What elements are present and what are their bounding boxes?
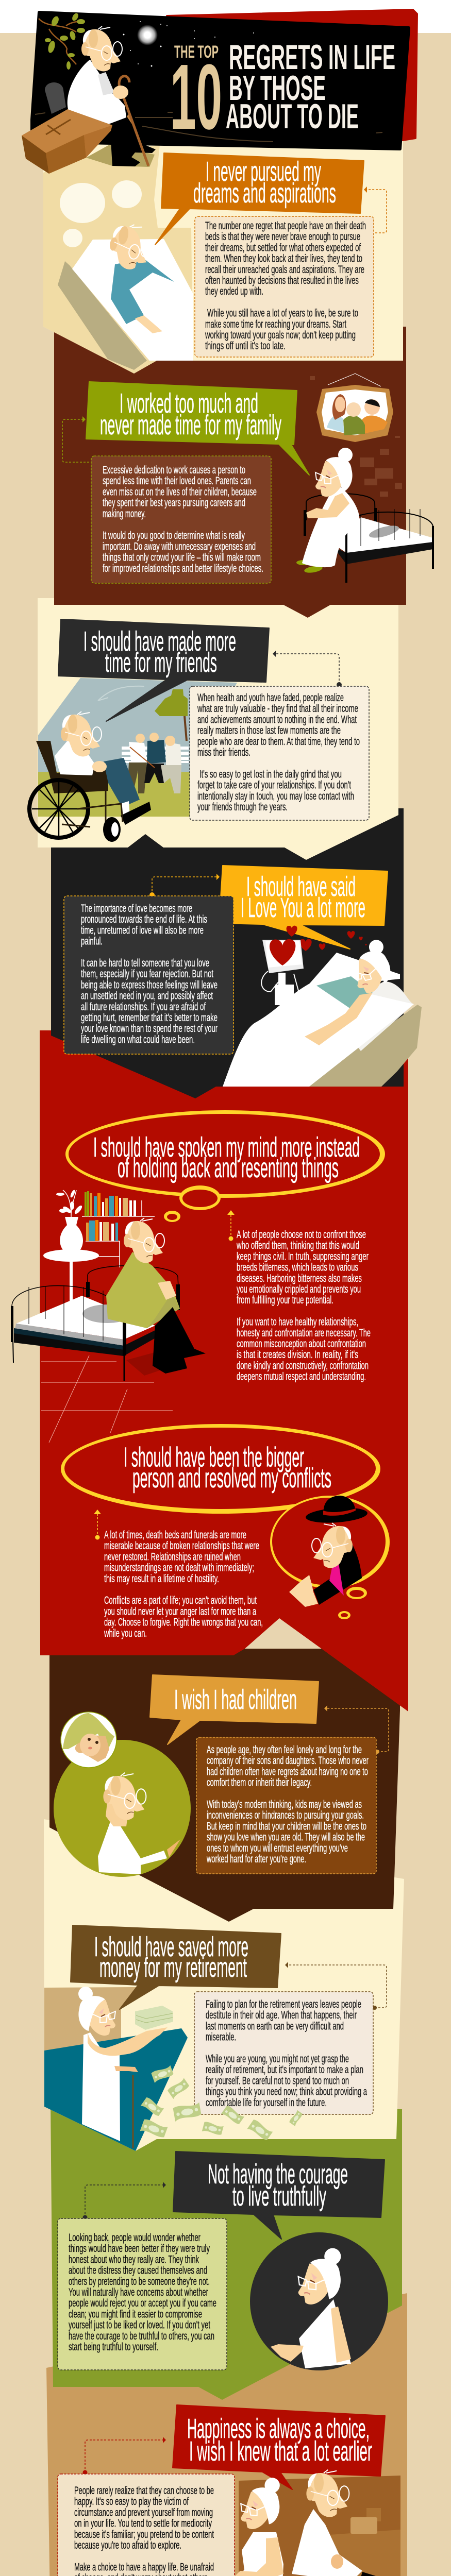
speech bubble bbox=[86, 382, 309, 475]
icon: moon bbox=[137, 25, 158, 45]
body text: others by pretending to be someone they're not. bbox=[69, 2276, 210, 2287]
body text: miserable. bbox=[206, 2031, 236, 2043]
panel: section 10 background bbox=[46, 2293, 407, 2576]
body text: reality of retirement, but it's important to make a plan bbox=[206, 2064, 363, 2076]
room: shelves, books and vase bbox=[41, 1189, 173, 1443]
hospital bed with old man bbox=[58, 221, 193, 370]
speech bubble bbox=[71, 1925, 281, 2009]
body text: making money. bbox=[103, 508, 146, 520]
body text: have the courage to be truthful to others, you can bbox=[69, 2330, 214, 2342]
icon: coffin bbox=[22, 109, 112, 174]
connector arrow bbox=[94, 1510, 101, 1539]
body text: While you are young, you might not yet grasp the bbox=[206, 2053, 349, 2065]
dark circle with old woman bbox=[250, 2232, 388, 2370]
panel: section 8 background bbox=[44, 1819, 404, 2151]
heading bbox=[83, 626, 236, 678]
body text: their dreams, but settled for what others expected of bbox=[205, 242, 361, 253]
body text: You will naturally have concerns about whether bbox=[69, 2286, 208, 2298]
ground shadow bbox=[86, 145, 155, 167]
panel: section 4 background bbox=[51, 804, 404, 1098]
heading bbox=[93, 1132, 360, 1183]
body text: honesty and confrontation are necessary. The bbox=[237, 1327, 371, 1339]
body text: even miss out on the lives of their children, because bbox=[103, 486, 257, 498]
park scene with wheelchair bbox=[29, 678, 237, 842]
connector arrow bbox=[273, 651, 342, 687]
body text: you should never let your anger last for more than a bbox=[104, 1605, 256, 1617]
body text: what are truly valuable - they find that all their income bbox=[197, 703, 358, 715]
body text: all future relationships. If you are afraid of bbox=[81, 1001, 206, 1013]
connector arrow bbox=[82, 2437, 166, 2475]
body text: for improved relationships and better lifestyle choices. bbox=[103, 563, 263, 574]
panel: section 2 background bbox=[54, 327, 406, 618]
panel: section 7 background bbox=[49, 1649, 400, 1922]
body text: important. Do away with unnecessary expenses and bbox=[103, 540, 256, 552]
body text: about the distress they caused themselves and bbox=[69, 2265, 207, 2277]
body text: things off until it's too late. bbox=[205, 340, 286, 352]
body text: clean; you might find it easier to compromise bbox=[69, 2308, 202, 2320]
body text: keep things civil. In truth, suppressing anger bbox=[237, 1250, 369, 1262]
body text: from fulfilling your true potential. bbox=[237, 1294, 333, 1306]
body text: honest about who they really are. They think bbox=[69, 2253, 199, 2265]
body text: who offend them, thinking that this would bbox=[236, 1240, 359, 1251]
body text bbox=[81, 903, 218, 1045]
body text: while you can. bbox=[104, 1628, 147, 1639]
stars bbox=[123, 21, 254, 67]
section 3: regret three bbox=[29, 619, 369, 842]
body text: an unsettled need in you, and possibly affect bbox=[81, 990, 213, 1002]
body text: common misconception about confrontation bbox=[237, 1338, 366, 1350]
teal couch bbox=[44, 2028, 188, 2151]
body text: deepens mutual respect and understanding. bbox=[237, 1371, 366, 1383]
tree branch bbox=[39, 12, 85, 70]
body text: Looking back, people would wonder whether bbox=[69, 2232, 201, 2244]
section 4: regret four bbox=[64, 866, 422, 1087]
connector arrow bbox=[227, 1210, 235, 1241]
body text: things that only crowd your life – this will make room bbox=[103, 552, 261, 564]
body text: People rarely realize that they can choose to be bbox=[74, 2485, 214, 2497]
arrowhead bbox=[82, 416, 86, 422]
section 8: regret eight: I should have saved more bbox=[94, 1931, 248, 1962]
body text: While you still have a lot of years to live, be sure to bbox=[207, 308, 358, 319]
body text: time, unreturned of love will also be more bbox=[81, 924, 204, 936]
text box bbox=[194, 1992, 373, 2114]
body text: is that it creates division. In reality, if it's bbox=[237, 1349, 358, 1361]
body text bbox=[197, 692, 360, 813]
body text: If you want to have healthy relationships, bbox=[237, 1316, 358, 1328]
body text: they spent their best years pursuing careers and bbox=[103, 497, 245, 509]
section 2: regret two bbox=[62, 374, 434, 583]
title bbox=[170, 38, 395, 149]
body text: start being truthful to yourself. bbox=[69, 2341, 158, 2353]
heading bbox=[124, 1442, 331, 1494]
green circle with old man bbox=[54, 1740, 191, 1877]
body text: breeds bitterness, which leads to various bbox=[237, 1262, 358, 1274]
body text: done kindly and constructively, confrontation bbox=[237, 1360, 369, 1371]
body text: Conflicts are a part of life; you can't avoid them, but bbox=[104, 1595, 257, 1606]
floating hearts bbox=[287, 926, 367, 951]
body text: When health and youth have faded, people realize bbox=[197, 692, 344, 704]
connector arrow bbox=[324, 1705, 389, 1754]
heading bbox=[94, 1931, 248, 1983]
header bbox=[22, 10, 417, 174]
body text: Excessive dedication to work causes a person to bbox=[103, 464, 245, 476]
icon: tombstone bbox=[45, 82, 66, 114]
ground lines bbox=[35, 112, 382, 142]
body text: painful. bbox=[81, 936, 103, 947]
old woman with money bbox=[78, 1987, 173, 2148]
body text: circumstance and prevent yourself from moving bbox=[74, 2506, 213, 2518]
section 9: regret nine bbox=[58, 2151, 388, 2370]
body text: being able to express those feelings will leave bbox=[81, 979, 218, 991]
text box bbox=[58, 2218, 227, 2370]
body text: last moments on earth can be very difficult and bbox=[206, 2020, 344, 2032]
body text: people who are dear to them. At that time, they tend to bbox=[197, 736, 360, 748]
body text: comfort them or inherit their legacy. bbox=[207, 1777, 312, 1789]
thought bubble bbox=[61, 1424, 390, 1619]
body text: things would have been better if they were truly bbox=[69, 2243, 210, 2255]
body text: Failing to plan for the retirement years leaves people bbox=[206, 1998, 361, 2010]
body text: destitute in their old age. When that happens, their bbox=[206, 2009, 357, 2021]
body text: them, especially if you fear rejection. But not bbox=[81, 968, 213, 980]
section 8: regret eight bbox=[44, 1712, 387, 2151]
heading bbox=[187, 2413, 372, 2467]
body text: Make a choice to have a happy life. Be unafraid bbox=[74, 2561, 214, 2573]
body text: day. Choose to forgive. Right the wrongs that you can, bbox=[104, 1617, 263, 1629]
header black panel bbox=[32, 12, 409, 149]
old man bbox=[282, 2470, 403, 2576]
body text: A lot of people choose not to confront those bbox=[237, 1229, 366, 1241]
body text: on in your life. You tend to settle for mediocrity bbox=[74, 2518, 212, 2530]
connector arrow bbox=[62, 419, 89, 462]
speech bubble bbox=[58, 619, 269, 721]
text box bbox=[195, 216, 374, 357]
body text: The importance of love becomes more bbox=[81, 903, 192, 914]
body text: for yourself. Be careful not to spend too much on bbox=[206, 2075, 349, 2087]
body text bbox=[69, 2232, 216, 2353]
body text bbox=[206, 1744, 369, 1865]
body text bbox=[104, 1529, 263, 1639]
body text: because it's familiar; you pretend to be content bbox=[74, 2529, 214, 2540]
body text: yourself just to be liked or loved. If you don't yet bbox=[69, 2319, 210, 2331]
body text: your friends through the years. bbox=[197, 801, 288, 813]
section 8: regret eight: money for my retirement bbox=[99, 1952, 247, 1983]
body text: getting hurt, remember that it's better to make bbox=[81, 1012, 218, 1024]
body text: and achievements amount to nothing in the end. What bbox=[197, 714, 357, 725]
arrowhead bbox=[364, 187, 367, 193]
speech bubble bbox=[173, 2151, 385, 2239]
text box bbox=[64, 896, 233, 1054]
body text bbox=[74, 2485, 214, 2576]
body text: often haunted by decisions that resulted in the lives bbox=[205, 275, 359, 286]
body text: worked hard for after you're gone. bbox=[206, 1853, 306, 1865]
body text: they ended up with. bbox=[205, 285, 263, 297]
body text: It would do you good to determine what is really bbox=[103, 530, 245, 541]
connector arrow bbox=[82, 2182, 166, 2219]
connector arrow bbox=[149, 874, 220, 897]
body text: miserable because of broken relationships that were bbox=[104, 1540, 259, 1552]
section 7: regret seven bbox=[150, 1675, 389, 1874]
title: BY THOSE bbox=[229, 69, 326, 108]
body text: A lot of times, death beds and funerals are more bbox=[104, 1529, 246, 1541]
baby in bubble bbox=[61, 1712, 116, 1768]
heading: I worked too much and bbox=[120, 388, 258, 419]
panel: section 3 background bbox=[38, 598, 398, 860]
title: 10 bbox=[170, 45, 222, 149]
section 7: regret seven: I wish I had children bbox=[174, 1684, 297, 1715]
body text: working toward your goals now; don't keep putting bbox=[205, 329, 356, 341]
old man on bed bbox=[11, 1218, 206, 1381]
body text: misunderstandings are not dealt with immediately; bbox=[104, 1562, 254, 1574]
back wall bbox=[44, 1987, 137, 2050]
body text: ones to whom you will entrust everything you've bbox=[207, 1842, 348, 1854]
old woman on bed bbox=[296, 448, 434, 583]
section 6: regret six bbox=[61, 1424, 390, 1639]
picture frame bbox=[316, 374, 393, 442]
panel: section 5 and 6 background bbox=[40, 1030, 408, 1711]
thought bubbles bbox=[60, 180, 142, 247]
body text: really matters in those last few moments are the bbox=[197, 725, 341, 737]
body text bbox=[206, 1998, 367, 2109]
body text: this may result in a lifetime of hostility. bbox=[104, 1573, 219, 1585]
body text: It can be hard to tell someone that you love bbox=[81, 957, 209, 969]
body text bbox=[205, 220, 366, 352]
body text: make some time for reaching your dreams. Start bbox=[205, 318, 346, 330]
connector arrow bbox=[285, 1962, 387, 2010]
text box bbox=[58, 2474, 235, 2576]
body text: comfortable life for yourself in the future. bbox=[206, 2097, 327, 2109]
section 5: regret five bbox=[11, 1110, 385, 1443]
panel: section 9 background bbox=[51, 2102, 402, 2400]
thought bubble bbox=[65, 1110, 385, 1222]
title: THE TOP bbox=[174, 42, 219, 62]
speech bubble bbox=[219, 866, 388, 949]
body text: life dwelling on what could have been. bbox=[81, 1033, 195, 1045]
body text: beds is that they were never brave enough to pursue bbox=[205, 231, 360, 243]
heading bbox=[208, 2159, 348, 2212]
body text: pronounced towards the end of life. At this bbox=[81, 913, 207, 925]
body text bbox=[103, 464, 263, 574]
heart monitor bbox=[261, 939, 304, 1005]
backdrop picture bbox=[239, 2476, 400, 2576]
old couple on coffin bbox=[219, 2470, 403, 2576]
heading: to live truthfully bbox=[232, 2181, 326, 2212]
speech bubble bbox=[173, 2405, 385, 2489]
body text: forget to take care of your relationships. If you don't bbox=[197, 779, 351, 791]
header red backing bbox=[167, 10, 417, 140]
text box bbox=[91, 456, 271, 583]
heading bbox=[193, 156, 336, 209]
body text: It's so easy to get lost in the daily grind that you bbox=[199, 768, 342, 780]
text box bbox=[196, 1737, 376, 1874]
panel: section 1 background bbox=[43, 139, 403, 374]
body text: miss their friends. bbox=[197, 747, 250, 758]
heading bbox=[100, 388, 281, 440]
man with hat bbox=[289, 1496, 368, 1607]
old woman in hospital bed bbox=[223, 938, 422, 1087]
body text: you emotionally crippled and prevents you bbox=[237, 1283, 361, 1295]
body text: diseases. Harboring bitterness also makes bbox=[237, 1273, 362, 1284]
bricks bbox=[310, 376, 402, 497]
old man standing bbox=[68, 26, 156, 166]
body text: never restored. Relationships are ruined when bbox=[104, 1551, 241, 1563]
speech bubble bbox=[155, 153, 364, 245]
body text: happy. It's so easy to play the victim of bbox=[74, 2496, 189, 2507]
old woman bbox=[219, 2478, 283, 2576]
body text: intentionally stay in touch, you may lose contact with bbox=[197, 790, 354, 802]
heading: time for my friends bbox=[105, 647, 217, 678]
heading: I never pursued my bbox=[206, 156, 321, 187]
heading bbox=[241, 871, 365, 923]
icon: falling money bbox=[140, 2065, 304, 2142]
section 1: regret one bbox=[58, 153, 387, 370]
body text bbox=[236, 1229, 371, 1383]
section 10: regret ten bbox=[58, 2405, 400, 2576]
body text: your love known than to spend the rest of your bbox=[81, 1023, 218, 1035]
body text: because you're too afraid to explore. bbox=[74, 2539, 181, 2551]
text box bbox=[190, 686, 369, 820]
body text: people would reject you or accept you if you came bbox=[69, 2297, 216, 2309]
speech bubble bbox=[150, 1675, 319, 1744]
section 3: regret three: I should have made more bbox=[83, 626, 236, 657]
section 1 backdrop bbox=[43, 145, 193, 374]
connector arrow bbox=[367, 190, 387, 233]
body text: spend less time with their loved ones. Parents can bbox=[103, 475, 251, 487]
